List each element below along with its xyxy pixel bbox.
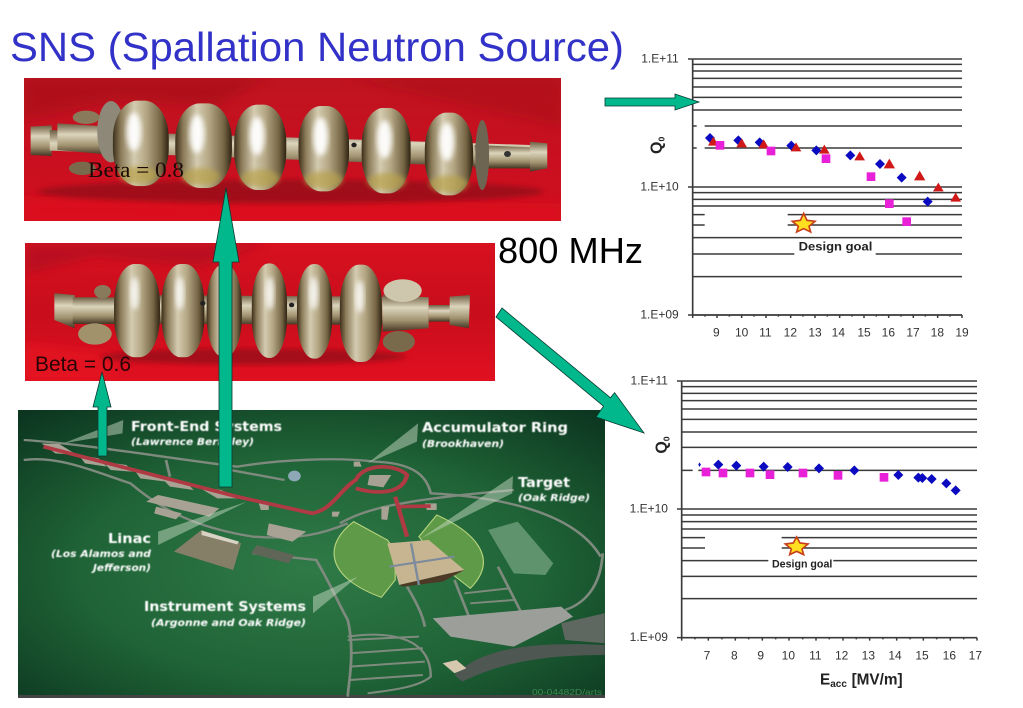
callout wedges — [63, 420, 513, 613]
y axis labels: 1.E+09 — [640, 307, 679, 321]
roads — [24, 440, 603, 697]
y axis labels: 1.E+10 — [630, 501, 668, 515]
y axis labels: 1.E+09 — [630, 630, 668, 644]
chart: beta 0.8 Q0 versus Eacc — [640, 51, 969, 339]
label: design goal: Design goal — [772, 558, 832, 570]
axis title Eacc: E — [820, 671, 830, 688]
icon: design goal star — [792, 213, 815, 232]
x axis labels: 14 — [888, 648, 902, 662]
x axis labels: 14 — [832, 325, 845, 339]
x axis labels: 15 — [857, 325, 871, 339]
x axis labels: 17 — [906, 325, 920, 339]
data: diamonds — [698, 460, 961, 495]
x axis labels: 8 — [731, 648, 738, 662]
x axis labels: 18 — [931, 325, 944, 339]
linac buildings — [41, 443, 437, 542]
map label: Instrument Systems: (Argonne and Oak Ridge) — [151, 618, 306, 629]
x axis labels: 9 — [757, 648, 764, 662]
panel: SNS site map — [18, 410, 605, 698]
map label: Front-End Systems — [131, 420, 282, 448]
map label: Target: (Oak Ridge) — [518, 493, 590, 504]
parking — [348, 588, 514, 693]
map credit: 00-04482D/arts — [532, 688, 602, 697]
axis title Q0: Q — [649, 142, 666, 154]
map label: Instrument Systems — [144, 600, 306, 629]
text: beta 0.6 label: Beta = 0.6 — [35, 353, 131, 376]
x axis labels: 9 — [713, 325, 720, 339]
x axis labels: 12 — [835, 648, 849, 662]
data: diamonds — [705, 133, 933, 207]
ghost buildings — [488, 522, 553, 575]
target building — [387, 540, 464, 585]
instrument fans — [334, 522, 395, 597]
x axis labels: 7 — [704, 648, 711, 662]
map label: Linac: (Los Alamos and — [51, 549, 152, 560]
y axis labels — [630, 373, 668, 644]
x axis labels — [713, 325, 969, 339]
label: design goal: Design goal — [799, 240, 872, 254]
red beamline and ring — [43, 447, 431, 537]
data: squares — [702, 468, 888, 482]
panel: beta 0.6 cavity photo — [23, 243, 495, 381]
icon: design goal star — [785, 537, 808, 555]
map label: Accumulator Ring — [422, 421, 568, 450]
map label: Front-End Systems: (Lawrence Berkeley) — [131, 437, 254, 448]
y axis labels: 1.E+11 — [631, 373, 668, 387]
text: 800 MHz: 800 MHz — [498, 230, 643, 271]
map label: Accumulator Ring: Accumulator Ring — [422, 421, 568, 436]
y axis labels: 1.E+10 — [640, 179, 679, 193]
axis title Q0: 0 — [661, 436, 671, 441]
arrow: linac to beta 0.8 cavity — [213, 188, 239, 487]
x axis labels: 10 — [735, 325, 749, 339]
x axis labels: 13 — [862, 648, 875, 662]
x axis labels: 16 — [943, 648, 956, 662]
panel: beta 0.8 cavity photo — [23, 77, 563, 223]
x axis labels: 17 — [969, 648, 982, 662]
map label: Linac — [51, 532, 152, 574]
y axis labels: 1.E+11 — [641, 51, 679, 65]
map label: Linac: Linac — [108, 532, 151, 547]
map label: Target — [518, 476, 590, 504]
arrow: front end to beta 0.6 cavity — [93, 372, 111, 456]
x axis labels: 10 — [782, 648, 795, 662]
x axis labels: 11 — [759, 325, 772, 339]
axis title Q0: 0 — [656, 137, 666, 142]
x axis labels — [704, 648, 982, 662]
map label: Accumulator Ring: (Brookhaven) — [422, 439, 504, 450]
map label: Front-End Systems: Front-End Systems — [131, 420, 282, 435]
axis title Q0: Q — [654, 441, 671, 454]
x axis labels: 19 — [955, 325, 969, 339]
arrow: beta 0.6 cavity to chart — [496, 308, 644, 433]
axis title Eacc: acc — [830, 679, 847, 690]
text: beta 0.8 label: Beta = 0.8 — [88, 157, 184, 182]
data: triangles — [708, 137, 961, 202]
x axis labels: 16 — [882, 325, 895, 339]
data: squares — [716, 141, 911, 226]
axis title Eacc: [MV/m] — [852, 671, 903, 688]
map label: Instrument Systems: Instrument Systems — [144, 600, 306, 615]
x axis labels: 13 — [808, 325, 822, 339]
title: SNS (Spallation Neutron Source) — [10, 24, 624, 70]
map label: Target: Target — [518, 476, 570, 491]
y axis labels — [640, 51, 679, 321]
x axis labels: 15 — [915, 648, 929, 662]
central lobby — [433, 607, 573, 647]
map label: Linac: Jefferson) — [91, 563, 151, 574]
x axis labels: 11 — [809, 648, 822, 662]
arrow: to beta 0.8 chart — [605, 94, 699, 110]
x axis labels: 12 — [784, 325, 797, 339]
chart: beta 0.6 Q0 versus Eacc — [630, 373, 982, 690]
